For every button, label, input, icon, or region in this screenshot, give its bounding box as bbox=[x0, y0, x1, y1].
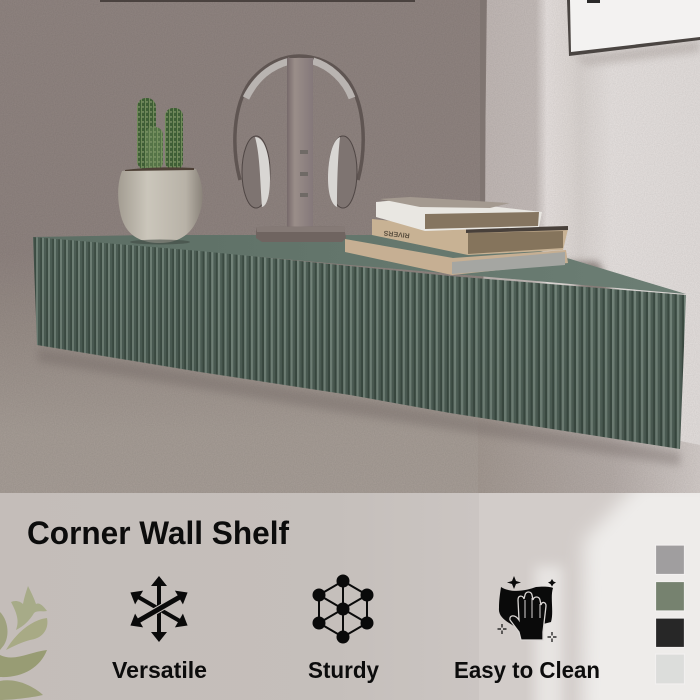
label: Versatile: Versatile bbox=[112, 657, 207, 683]
icon: sturdy hexagon network bbox=[314, 576, 372, 642]
headband bbox=[235, 56, 363, 180]
icon: hand wiping with cloth bbox=[498, 576, 556, 642]
colour swatches bbox=[656, 545, 684, 684]
framed picture bbox=[567, 0, 700, 56]
shelf top surface bbox=[33, 235, 686, 294]
stand pole bbox=[287, 58, 313, 233]
middle book bbox=[372, 219, 568, 255]
right wall background bbox=[478, 0, 700, 700]
icon: versatile arrows bbox=[126, 576, 192, 642]
wall corner line bbox=[480, 0, 486, 240]
wall texture bbox=[0, 0, 700, 493]
label: Sturdy: Sturdy bbox=[308, 657, 379, 683]
headphone stand bbox=[235, 56, 363, 242]
cactus bbox=[137, 98, 183, 170]
plant decoration bbox=[0, 586, 47, 700]
bottom panel bbox=[0, 480, 700, 700]
bottom book bbox=[345, 239, 568, 275]
plant pot bbox=[118, 167, 203, 244]
top edge of frame above bbox=[100, 0, 415, 2]
right ear cup bbox=[328, 136, 357, 208]
title: Corner Wall Shelf bbox=[27, 515, 289, 551]
left wall background bbox=[0, 0, 487, 700]
stack of books bbox=[345, 197, 568, 275]
top book bbox=[376, 197, 542, 231]
shadow under shelf bbox=[38, 348, 680, 466]
shelf fluted front bbox=[33, 237, 686, 449]
label: Easy to Clean: Easy to Clean bbox=[454, 657, 600, 683]
middle book: RIVERS bbox=[383, 229, 410, 238]
left ear cup bbox=[242, 136, 270, 208]
stand base bbox=[256, 226, 346, 242]
